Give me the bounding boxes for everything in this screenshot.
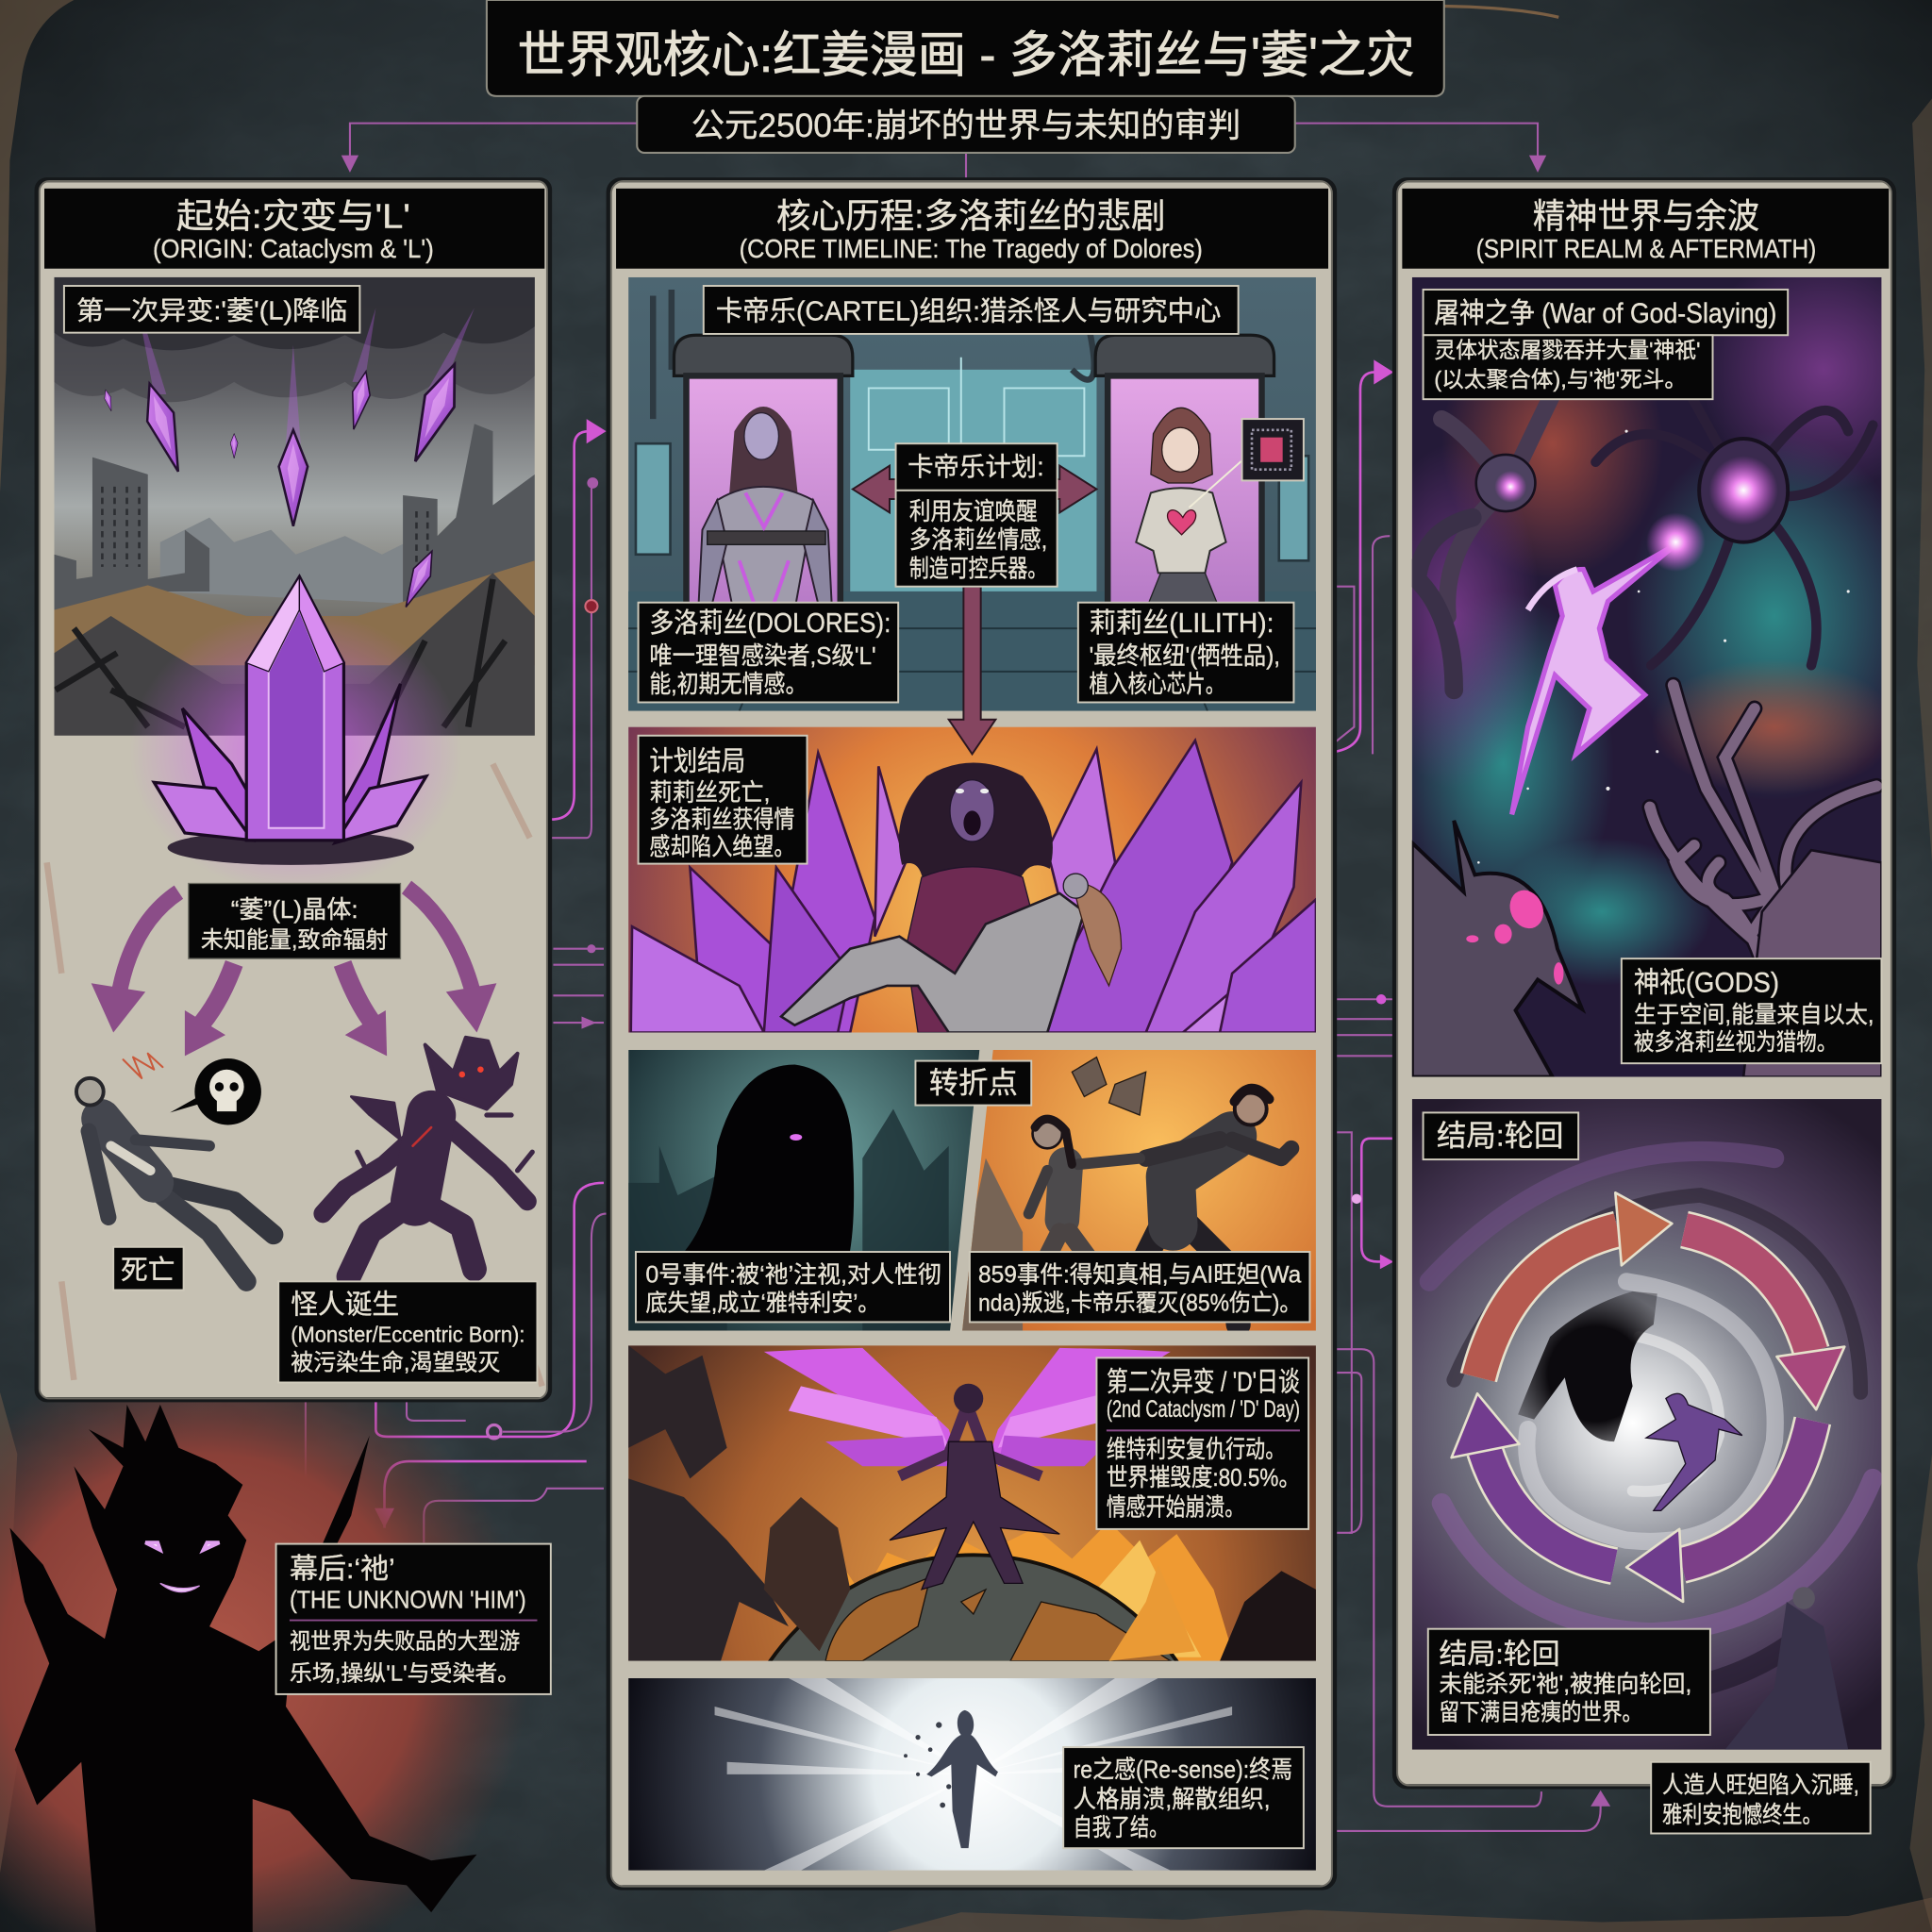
callout: ending reincarnation: 留下满目疮痍的世界。 [1440,1699,1642,1725]
callout: second cataclysm: 第二次异变 / 'D'日谈 [1107,1368,1300,1398]
callout: plan ending: 感却陷入绝望。 [649,832,794,860]
callout: Dolores [639,603,898,702]
callout: behind the scenes [276,1544,551,1694]
callout: event 859 [970,1252,1309,1322]
figure: fallen man [76,1054,274,1281]
label: L crystal: “萎”(L)晶体: [231,895,358,924]
callout: cartel plan [896,443,1058,587]
origin header: (ORIGIN: Cataclysm & 'L') [153,234,434,263]
icon: core chip [1189,419,1304,508]
icon: skull bubble [170,1058,261,1124]
callout: behind the scenes: (THE UNKNOWN 'HIM') [290,1585,526,1613]
callout: behind the scenes: 乐场,操纵'L'与受染者。 [290,1661,520,1686]
label: monster born [278,1281,537,1382]
label: ending: 结局:轮回 [1437,1120,1563,1153]
callout: gods: 被多洛莉丝视为猎物。 [1634,1029,1837,1056]
callout: war of god-slaying: 灵体状态屠戮吞并大量'神祇' [1434,338,1700,362]
label: death [113,1247,184,1291]
circuit lines: middle-right gutter [1336,359,1610,1831]
callout: Lilith: '最终枢纽'(牺牲品), [1090,641,1280,670]
label: ending [1424,1112,1578,1159]
callout: second cataclysm [1096,1357,1308,1529]
rust stains [47,764,542,1386]
callout: event 0 [636,1252,950,1322]
callout: re-sense [1063,1747,1304,1848]
callout: plan ending: 莉莉丝死亡, [649,778,770,807]
panel: spirit realm [1368,180,1932,1787]
callout: cartel plan: 制造可控兵器。 [909,554,1047,582]
tube: Dolores [674,335,853,610]
callout: Lilith [1078,603,1293,702]
callout: event 859: nda)叛逃,卡帝乐覆灭(85%伤亡)。 [978,1291,1301,1317]
callout: event 859: 859事件:得知真相,与AI旺妲(Wa [978,1262,1301,1289]
scene: cartel lab [628,277,1316,711]
label: monster born: (Monster/Eccentric Born): [291,1322,525,1346]
title banner: 世界观核心:红姜漫画 - 多洛莉丝与'萎'之灾 [518,28,1414,83]
label: turning point [915,1061,1031,1106]
panel: origin [37,180,550,1400]
label: death: 死亡 [121,1256,175,1286]
callout: Dolores: 唯一理智感染者,S级'L' [649,641,876,670]
callout: second cataclysm: 世界摧毁度:80.5%。 [1107,1463,1300,1491]
callout: behind the scenes: 视世界为失败品的大型游 [290,1629,520,1654]
callout: re-sense: 人格崩溃,解散组织, [1074,1785,1271,1813]
callout: ending reincarnation: 结局:轮回 [1440,1639,1560,1670]
callout: event 0: 底失望,成立‘雅特利安’。 [645,1291,880,1317]
callout: gods: 神祇(GODS) [1634,967,1779,998]
silhouette: the unknown HIM [0,1402,514,1932]
subtitle banner: 公元2500年:崩坏的世界与未知的审判 [691,108,1241,144]
callout: event 0: 0号事件:被‘祂’注视,对人性彻 [645,1262,941,1289]
callout: cartel plan: 卡帝乐计划: [908,452,1044,481]
callout: wanda and aryan aftermath: 雅利安抱憾终生。 [1662,1802,1823,1828]
origin header: 起始:灾变与'L' [176,197,410,236]
callout: re-sense: 自我了结。 [1074,1813,1168,1841]
figure: monster [323,1038,532,1276]
subtitle banner [637,96,1295,153]
icon: reincarnation cycle arrows [1452,1192,1844,1602]
callout: war of god-slaying: 屠神之争 (War of God-Slaying) [1434,298,1776,329]
label: L crystal [189,883,400,958]
callout: second cataclysm: 情感开始崩溃。 [1107,1493,1244,1522]
callout: gods [1622,958,1881,1063]
callout: wanda and aryan aftermath [1651,1762,1871,1834]
callout: behind the scenes: 幕后:‘祂’ [290,1554,395,1585]
callout: war of god-slaying [1424,290,1788,399]
scene: crystals falling on ruined city [54,277,535,736]
label: cartel [704,286,1239,334]
label: turning point: 转折点 [929,1067,1018,1100]
label: cartel: 卡帝乐(CARTEL)组织:猎杀怪人与研究中心 [716,297,1221,327]
callout: gods: 生于空间,能量来自以太, [1634,1002,1874,1028]
callout: wanda and aryan aftermath: 人造人旺妲陷入沉睡, [1662,1772,1859,1798]
callout: cartel plan: 多洛莉丝情感, [909,525,1047,554]
arrow: plan to outcome [949,587,995,754]
label: first anomaly: 第一次异变:'萎'(L)降临 [76,295,347,325]
scene: re-sense burst [628,1678,1316,1871]
callout: second cataclysm: 维特利安复仇行动。 [1107,1435,1285,1463]
callout: Lilith: 植入核心芯片。 [1090,670,1224,698]
spirit header: (SPIRIT REALM & AFTERMATH) [1476,234,1816,263]
circuit lines: left-middle gutter [306,419,607,1542]
callout: cartel plan: 利用友谊唤醒 [909,497,1038,525]
label: first anomaly [64,286,359,333]
label: monster born: 被污染生命,渴望毁灭 [291,1350,500,1375]
callout: plan ending: 计划结局 [649,746,745,776]
timeline header: 核心历程:多洛莉丝的悲剧 [776,197,1166,236]
callout: Dolores: 多洛莉丝(DOLORES): [649,608,891,639]
arrows: crystal effects [92,887,496,1056]
origin header [44,189,544,269]
scene: event zero [628,1050,986,1331]
timeline header: (CORE TIMELINE: The Tragedy of Dolores) [740,234,1203,263]
panel: core timeline [608,180,1335,1932]
callout: re-sense: re之感(Re-sense):终焉 [1074,1756,1292,1784]
scene: event 859 [961,1050,1319,1331]
callout: ending reincarnation: 未能杀死'祂',被推向轮回, [1440,1671,1691,1697]
callout: plan ending [639,736,808,864]
scene: second cataclysm [628,1345,1316,1661]
callout: war of god-slaying: (以太聚合体),与'祂'死斗。 [1434,367,1687,391]
scene: reincarnation vortex [1412,1099,1881,1750]
arrow: plan double arrow [853,466,1096,512]
spirit header: 精神世界与余波 [1533,197,1759,236]
callout: Lilith: 莉莉丝(LILITH): [1090,608,1274,639]
connector lines from subtitle to panels [341,124,1546,180]
scene: plan outcome [628,727,1316,1033]
tube: Lilith [1095,335,1274,610]
title banner [487,0,1444,96]
callout: second cataclysm: (2nd Cataclysm / 'D' Day) [1107,1397,1300,1423]
callout: ending reincarnation [1428,1629,1710,1735]
callout: plan ending: 多洛莉丝获得情 [649,806,794,834]
scene: war of god-slaying [1368,246,1932,1077]
timeline header [616,189,1328,269]
icon: giant L crystal [129,576,462,893]
spirit header [1402,189,1889,269]
label: monster born: 怪人诞生 [291,1290,399,1320]
label: L crystal: 未知能量,致命辐射 [201,927,388,953]
callout: Dolores: 能,初期无情感。 [649,670,808,698]
